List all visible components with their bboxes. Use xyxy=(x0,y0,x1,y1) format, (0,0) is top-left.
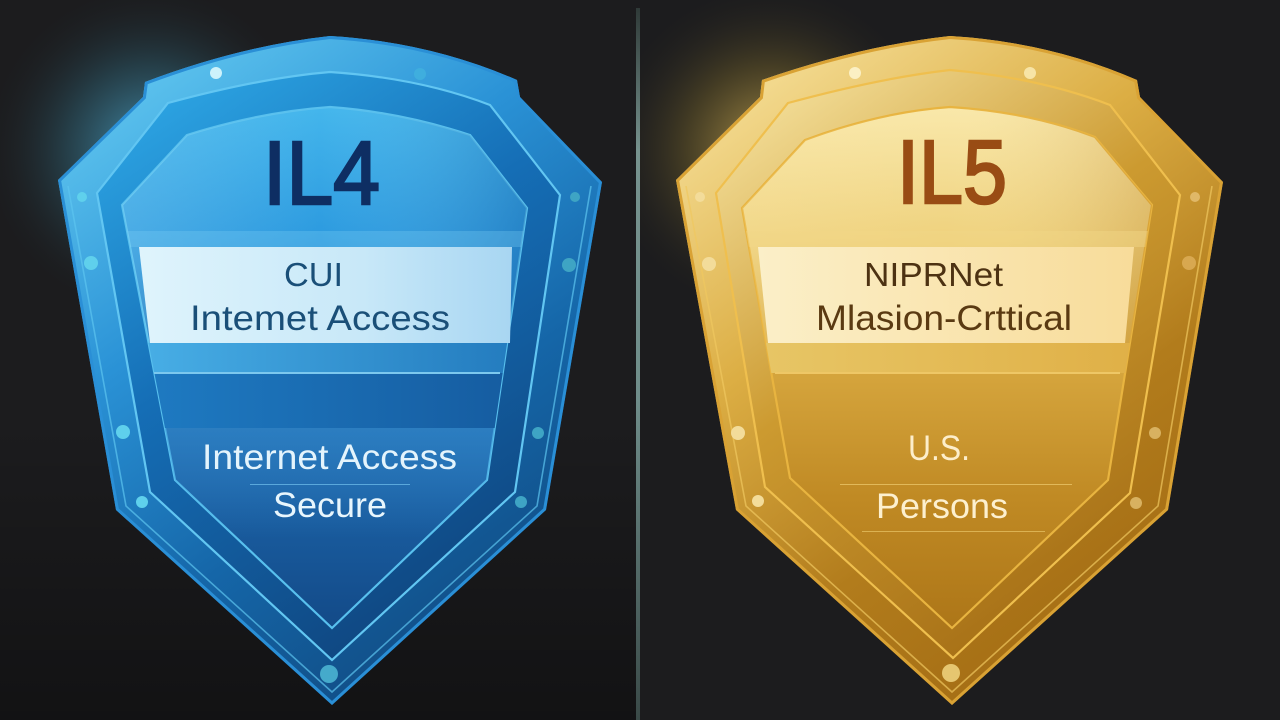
text: Intemet Access: Intemet Access xyxy=(190,299,450,338)
shield frame: IL5 outer xyxy=(676,36,1223,705)
text: NIPRNet: NIPRNet xyxy=(864,256,1003,293)
text: Mlasion-Crttical: Mlasion-Crttical xyxy=(816,299,1072,338)
rule below Persons xyxy=(862,531,1045,532)
highlighted band: IL5 xyxy=(758,247,1134,343)
text: U.S.: U.S. xyxy=(908,429,970,468)
panel: IL5 gold shield xyxy=(676,36,1223,705)
rivets: IL4 xyxy=(77,67,580,683)
rule above Persons xyxy=(840,484,1072,485)
heading: IL5: IL5 xyxy=(897,123,1007,223)
rule under Internet Access xyxy=(250,484,410,485)
shield panel: IL4 inner xyxy=(100,100,540,628)
panel: IL4 blue shield xyxy=(58,36,602,705)
band divider: IL4 xyxy=(154,372,500,374)
text: Persons: Persons xyxy=(876,487,1008,526)
band divider: IL5 xyxy=(775,372,1120,374)
text: Internet Access: Internet Access xyxy=(202,438,457,477)
shield frame: IL4 outer xyxy=(58,36,602,705)
text: Secure: Secure xyxy=(273,486,387,525)
rivets: IL5 xyxy=(695,67,1200,682)
text: CUI: CUI xyxy=(284,256,343,293)
shield panel: IL5 inner xyxy=(720,100,1170,628)
heading: IL4: IL4 xyxy=(263,124,380,224)
divider line xyxy=(636,8,640,720)
highlighted band: IL4 xyxy=(139,247,512,343)
